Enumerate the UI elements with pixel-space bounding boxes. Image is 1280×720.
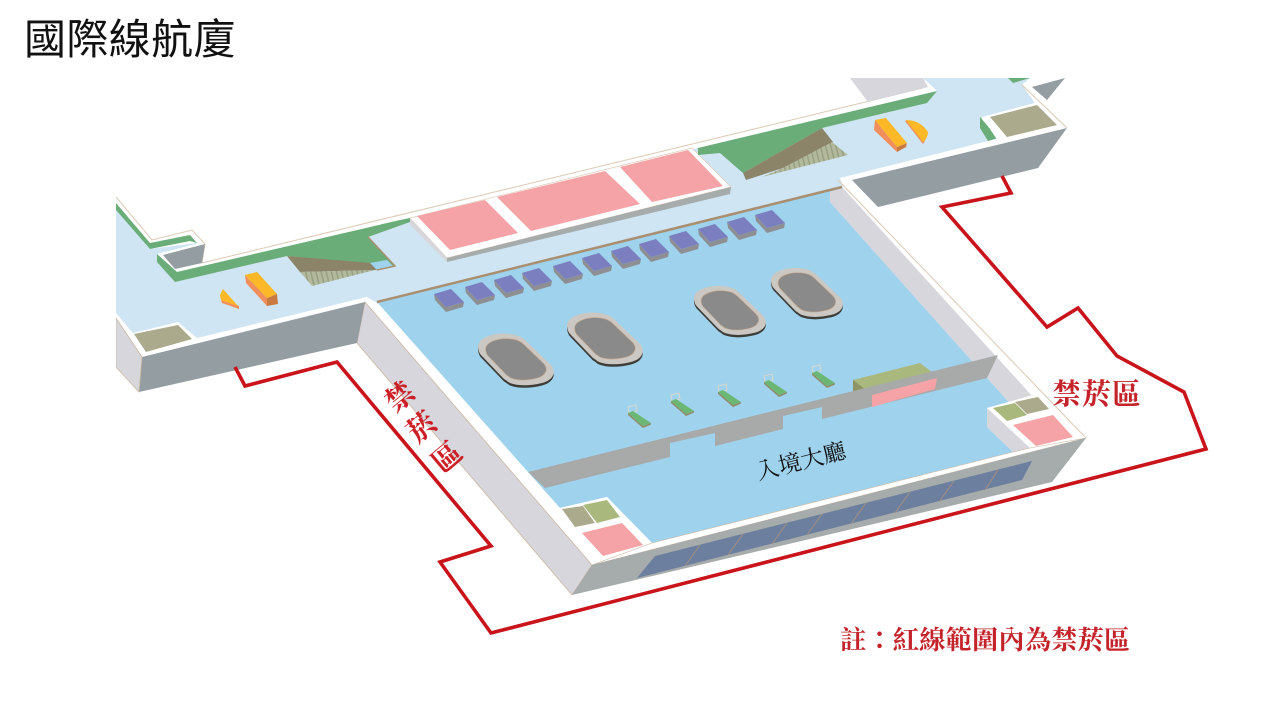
row of immigration counters xyxy=(434,210,785,312)
hall right white band xyxy=(838,180,1086,438)
hall back edge xyxy=(377,187,842,302)
left staircase xyxy=(287,237,395,286)
right staircase xyxy=(743,128,848,180)
row of green benches xyxy=(628,365,835,428)
left wing side wall xyxy=(116,318,142,392)
front facade top band xyxy=(592,438,1086,565)
baggage carousel 4 xyxy=(771,268,843,319)
baggage carousel 1 xyxy=(478,334,554,388)
back wall outline xyxy=(116,88,923,263)
partition wall xyxy=(528,355,998,488)
right orange counters xyxy=(874,118,928,152)
right wing outer wall xyxy=(852,128,1067,207)
label: no-smoking zone left xyxy=(379,375,469,479)
hall right wall xyxy=(830,187,1033,408)
floor plan: international terminal xyxy=(116,78,1086,595)
label: no-smoking zone left: 禁 xyxy=(379,375,423,419)
front left room group xyxy=(560,497,652,565)
note: 註：紅線範圍內為禁菸區 xyxy=(840,625,1130,655)
arrivals hall floor xyxy=(377,187,1013,543)
left wing outer wall xyxy=(139,302,365,392)
left wing corner room xyxy=(134,325,192,352)
upper right corner rooms xyxy=(980,78,1067,144)
pink block of rooms xyxy=(410,148,731,262)
kiosk pink front xyxy=(872,378,937,407)
title: 國際線航廈 xyxy=(24,16,236,63)
baggage carousel 2 xyxy=(567,313,643,367)
kiosk behind partition xyxy=(853,363,932,392)
left green wall and stair backing xyxy=(157,218,410,282)
front facade wall xyxy=(572,438,1086,595)
upper corridor floor xyxy=(116,78,1035,338)
front right room group xyxy=(987,395,1086,452)
baggage carousel 3 xyxy=(694,286,766,337)
grey wall at top xyxy=(850,78,928,102)
small notch room xyxy=(157,243,205,272)
label: no-smoking zone left: 區 xyxy=(426,435,469,479)
label: no-smoking zone left: 菸 xyxy=(401,405,444,449)
left orange counters xyxy=(220,272,278,309)
main hall light grey left wall xyxy=(357,302,592,595)
front facade windows xyxy=(637,461,1032,578)
upper right green wall xyxy=(698,91,937,173)
hall label: 入境大廳 xyxy=(753,438,850,485)
label: no-smoking zone right: 禁菸區 xyxy=(1052,378,1142,411)
red no-smoking boundary line xyxy=(235,176,1206,633)
left green wall strip xyxy=(116,203,197,249)
